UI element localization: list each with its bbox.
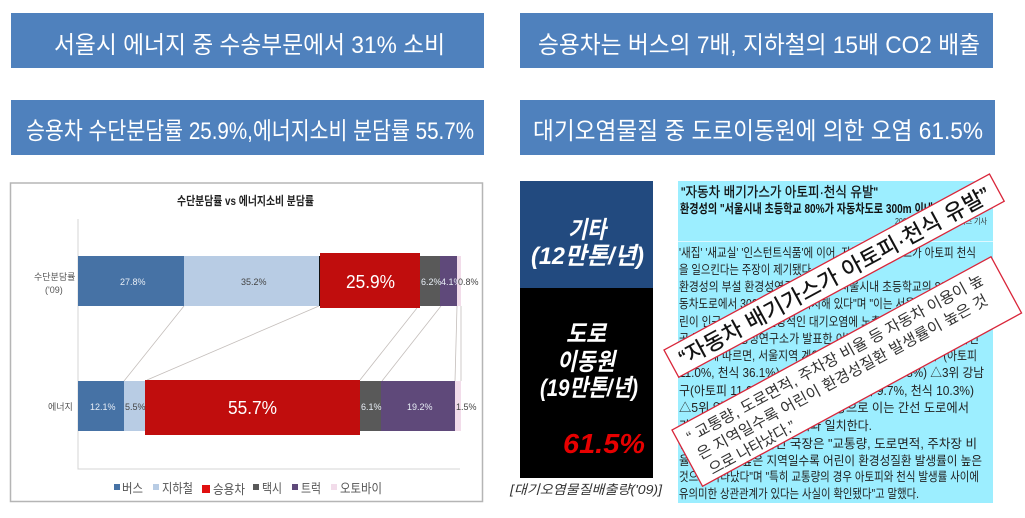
article body: 가까운 지역의 발생률 순위와 일치한다.	[679, 419, 872, 433]
caption: [대기오염물질배출량('09)]	[509, 482, 662, 497]
segment: other sources: 기타	[568, 217, 609, 244]
banner: modal share versus energy share: 승용차 수단분담률 25.9%,에너지소비 분담률 55.7%	[26, 118, 474, 145]
article body: 환경성연구소 김미선 국장은 "교통량, 도로면적, 주차장 비	[679, 437, 977, 451]
callout: director quote: 으로 나타났다.”	[706, 417, 799, 479]
segment: other sources	[520, 181, 653, 288]
segment: other sources: (12만톤/년)	[531, 243, 644, 270]
banner: passenger car CO2 emission	[520, 13, 993, 68]
segment: road mobile sources: 도로	[566, 321, 608, 348]
bar: modal share: 27.8%	[120, 277, 146, 287]
category labels: 에너지	[48, 402, 73, 412]
callout: director quote: 은 지역일수록 어린이 환경성질환 발생률이 높은 것	[694, 291, 991, 463]
article body: △5위 영등포구(아토피 8.9%) 등으로 이는 간선 도로에서	[679, 401, 969, 415]
banner: road mobile source pollution	[520, 100, 995, 155]
legend: 오토바이	[340, 481, 382, 496]
bar: modal share: 35.2%	[241, 277, 267, 287]
article headline: "자동차 배기가스가 아토피·천식 유발"	[681, 184, 878, 200]
article body: 유의미한 상관관계가 있다는 사실이 확인됐다"고 말했다.	[679, 486, 919, 501]
banner: modal share versus energy share	[11, 100, 484, 155]
article body: 동차도로에서 300m 이내에 위치해 있다"며 "이는 서울시내 대다수 어	[679, 297, 979, 311]
bar: energy share: 6.1%	[361, 402, 382, 412]
banner: energy use of transport sector: 서울시 에너지 중 수송부문에서 31% 소비	[54, 32, 445, 59]
callout: headline quote: “자동차 배기가스가 아토피·천식 유발”	[675, 182, 994, 371]
segment: road mobile sources: 이동원	[557, 349, 618, 376]
article body: '새집' '새교실' '인스턴트식품'에 이어, 자동차 배기가스가 아토피 천식	[679, 245, 976, 260]
article body: 을 일으킨다는 주장이 제기됐다.	[679, 263, 814, 277]
bar: energy share: 19.2%	[407, 402, 433, 412]
article body: 환경성의 부설 환경성연구소는 최근 서울시내 초등학교의 80%가 자	[679, 280, 979, 294]
panel: stacked bar chart	[10, 183, 482, 502]
segment: road mobile sources: 61.5%	[563, 428, 645, 459]
bar: energy share	[78, 380, 477, 435]
category labels	[34, 271, 75, 412]
legend: 버스	[122, 481, 143, 496]
article body: 구(아토피 11.0%) △4위 서초구(아토피 9.7%, 천식 10.3%)	[679, 383, 974, 398]
banner: road mobile source pollution: 대기오염물질 중 도로이동원에 의한 오염 61.5%	[533, 118, 983, 145]
panel: newspaper article	[678, 181, 993, 503]
bar: modal share	[78, 253, 479, 308]
bar: energy share: 12.1%	[90, 402, 116, 412]
banner: energy use of transport sector	[11, 13, 484, 68]
bar: modal share: 0.8%	[458, 277, 479, 287]
legend	[114, 481, 382, 497]
series connector lines	[124, 306, 461, 381]
callout: director quote	[672, 257, 1022, 486]
category labels: ('09)	[45, 285, 63, 295]
article body: 11.0%, 천식 36.1%) △2위 성동구 (아토피 15.8%) △3위 강남	[679, 365, 984, 380]
article body: 보고서에 따르면, 서울지역 계의 구별 발생률은 △1위 중구 (아토피	[679, 349, 977, 363]
article body	[679, 245, 984, 501]
article subheading: 환경성의 "서울시내 초등학교 80%가 자동차도로 300m 이내	[680, 201, 933, 216]
segment: road mobile sources: (19만톤/년)	[540, 375, 638, 402]
article body: 린이 인구 대부분이 일상적인 대기오염에 노출되어 있다는 뜻"이라고	[679, 315, 979, 329]
axis lines	[78, 219, 460, 469]
bar: energy share: 55.7%	[228, 398, 277, 418]
bar: modal share: 25.9%	[346, 272, 395, 292]
article body: 율 등 이용이 높은 지역일수록 어린이 환경성질환 발생률이 높은	[679, 454, 982, 468]
banner: passenger car CO2 emission: 승용차는 버스의 7배, 지하철의 15배 CO2 배출	[538, 32, 980, 59]
legend: 지하철	[162, 481, 193, 496]
bar: energy share: 5.5%	[125, 402, 146, 412]
bar: energy share: 1.5%	[456, 402, 477, 412]
chart title: 수단분담률 vs 에너지소비 분담률	[177, 194, 314, 208]
segment: road mobile sources	[520, 288, 653, 478]
legend: 택시	[262, 481, 282, 496]
legend: 승용차	[213, 482, 245, 497]
legend: 트럭	[301, 481, 321, 496]
bar: modal share: 4.1%	[441, 277, 462, 287]
callout: director quote: “ 교통량, 도로면적, 주차장 비율 등 자동차 이용이 높	[684, 271, 987, 446]
article body: 곧 밝혔다. 환경성연구소가 발표한 이번 조사 보고서 결과에 의하면	[679, 332, 979, 346]
panel: air pollutant emissions column	[509, 181, 662, 497]
category labels: 수단분담률	[34, 271, 75, 282]
article date line: 2009-05-07 10:34 뉴시스 기사	[895, 217, 988, 226]
bar: modal share: 6.2%	[421, 277, 442, 287]
